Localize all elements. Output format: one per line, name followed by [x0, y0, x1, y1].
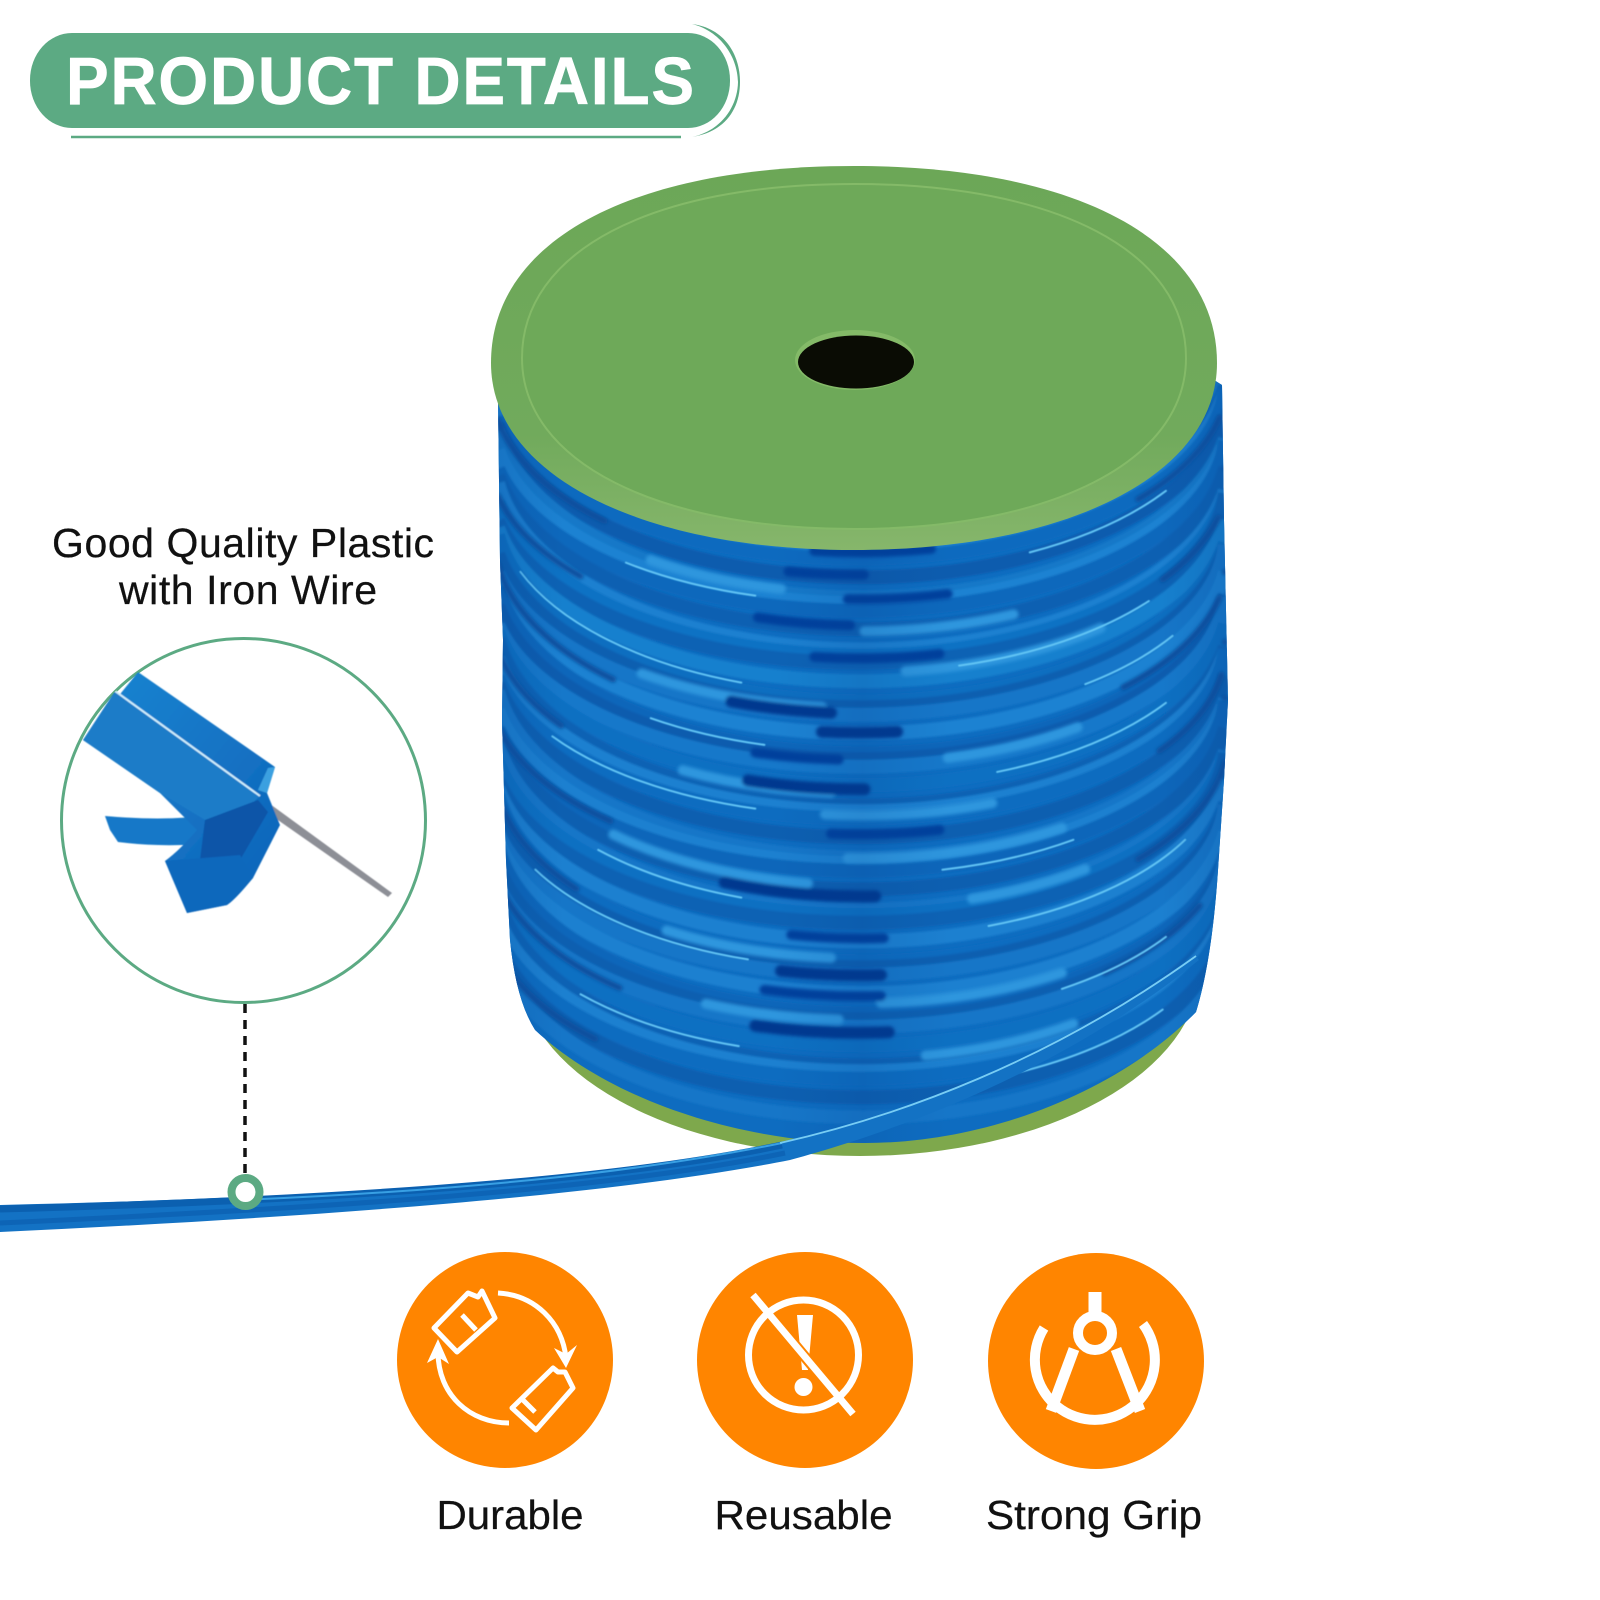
dashed leader line — [243, 1004, 247, 1176]
callout text: material — [52, 520, 434, 613]
icon: durable — [397, 1252, 613, 1468]
callout text: material: with Iron Wire — [118, 567, 377, 613]
marker ring on ribbon — [232, 1178, 260, 1206]
small ribbon strip — [105, 816, 210, 845]
label: reusable: Reusable — [714, 1492, 892, 1538]
callout text: material: Good Quality Plastic — [52, 520, 434, 566]
heading: product details badge: PRODUCT DETAILS — [66, 44, 694, 118]
label: durable: Durable — [436, 1492, 584, 1538]
heading: product details badge — [30, 24, 740, 137]
spool body: wound blue ribbon — [490, 360, 1235, 1160]
wire — [265, 804, 392, 897]
main ribbon body — [83, 672, 280, 913]
icon: strong grip — [988, 1253, 1204, 1469]
loose ribbon strand leading from spool — [0, 955, 1199, 1232]
icon: reusable — [697, 1252, 913, 1468]
magnified detail circle: ribbon end with iron wire — [62, 638, 426, 1002]
bottom flange of spool — [520, 780, 1200, 1156]
top flange of spool with centre hole — [491, 166, 1217, 550]
label: strong grip: Strong Grip — [986, 1492, 1202, 1538]
